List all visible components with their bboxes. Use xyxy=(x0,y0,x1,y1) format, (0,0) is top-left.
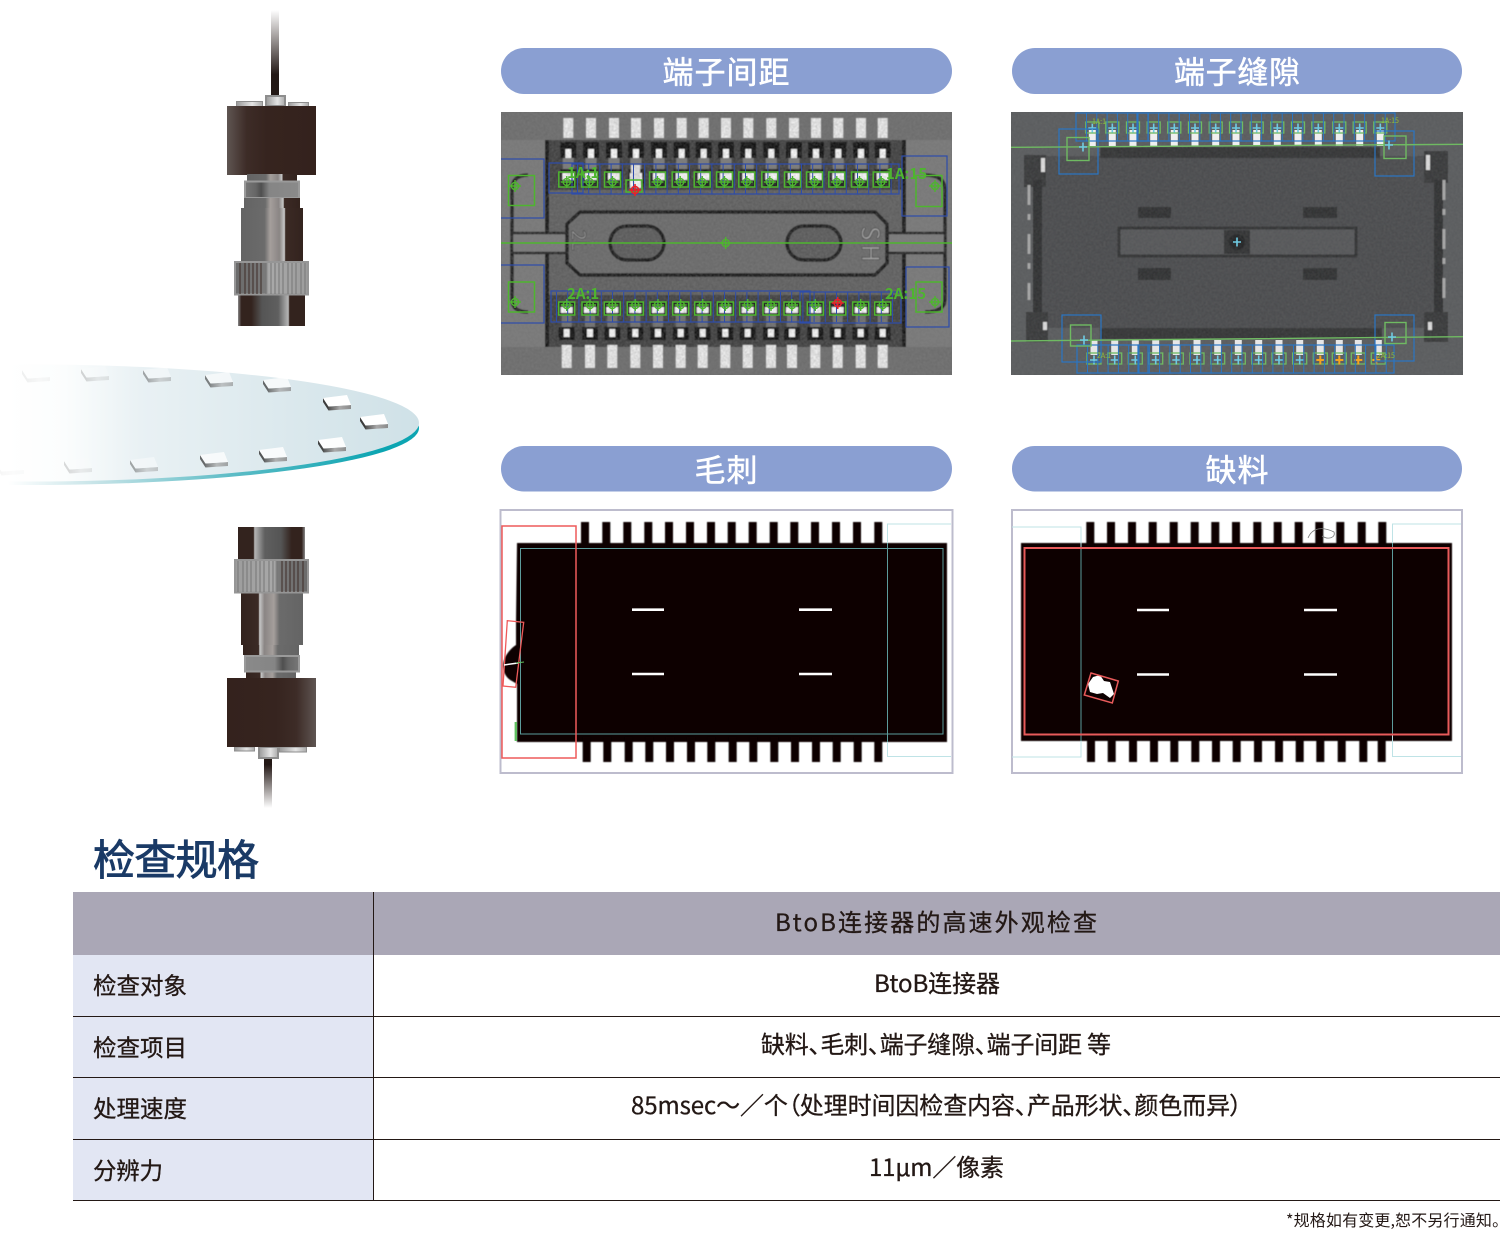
connector housing: 2L xyxy=(566,230,593,251)
detection frames xyxy=(502,524,951,758)
connector housing xyxy=(501,112,952,375)
row: inspection items: 检查项目 xyxy=(93,1029,187,1063)
table header row xyxy=(73,892,1500,955)
inspection image: terminal gap xyxy=(1011,112,1463,375)
row: processing speed: 处理速度 xyxy=(93,1090,187,1124)
pins and markers xyxy=(1011,113,1463,373)
row: resolution: 分辨力 xyxy=(93,1152,163,1186)
row: inspection items: 缺料、毛刺、端子缝隙、端子间距 等 xyxy=(761,1025,1111,1060)
heading pill: missing material xyxy=(1012,446,1462,492)
green measurement marks xyxy=(501,162,952,315)
row: resolution xyxy=(93,1148,1004,1186)
heading pill: terminal gap xyxy=(1012,48,1462,94)
row: inspection target: BtoB连接器 xyxy=(874,964,1000,999)
green measurement marks: 2A:1 xyxy=(567,283,599,304)
row: inspection target: 检查对象 xyxy=(93,967,187,1001)
pins and markers: 1A:15 xyxy=(1381,116,1399,126)
connector base xyxy=(1024,114,1451,342)
heading pill: burr xyxy=(501,446,952,492)
blue search regions xyxy=(500,156,949,327)
heading pill: terminal pitch xyxy=(501,48,952,94)
connector camera: bottom xyxy=(227,527,316,808)
missing-material blob xyxy=(1088,675,1114,698)
heading pill: missing material: 缺料 xyxy=(1206,446,1268,490)
heading pill: terminal pitch: 端子间距 xyxy=(662,48,790,92)
title: inspection specs: 检查规格 xyxy=(93,827,259,888)
inspection image: terminal pitch xyxy=(500,112,952,375)
row: processing speed: 85msec～／个（处理时间因检查内容、产品形状、颜色而异） xyxy=(631,1086,1242,1121)
slits xyxy=(1137,610,1337,674)
pins and markers: 2A:1 xyxy=(1097,351,1111,361)
pins and markers: 1A:1 xyxy=(1092,117,1106,127)
inspection image: missing material xyxy=(1012,510,1462,773)
wafer disc with chips xyxy=(0,364,419,485)
green measurement marks: 2A:15 xyxy=(885,283,926,304)
binarised connector body xyxy=(1021,543,1452,741)
detection frames xyxy=(1012,524,1461,757)
row label column xyxy=(73,955,373,1201)
row: inspection items xyxy=(93,1025,1111,1063)
spec table xyxy=(73,892,1500,1201)
slits xyxy=(632,610,832,674)
row: inspection target xyxy=(93,964,1000,1001)
connector housing: SH xyxy=(855,226,890,262)
inspection image: burr xyxy=(500,510,952,773)
pins and markers: 2A:15 xyxy=(1377,351,1395,361)
connector camera: top xyxy=(227,10,316,326)
row: processing speed xyxy=(93,1086,1242,1124)
footnote: *规格如有变更,恕不另行通知。 xyxy=(1286,1207,1500,1231)
green measurement marks: 1A:15 xyxy=(886,163,927,184)
binarised connector body xyxy=(503,543,947,742)
green measurement marks: 1A:1 xyxy=(567,162,599,183)
table header row: BtoB连接器的高速外观检查 xyxy=(775,903,1097,938)
heading pill: burr: 毛刺 xyxy=(694,446,758,490)
heading pill: terminal gap: 端子缝隙 xyxy=(1174,48,1300,92)
row: resolution: 11µm／像素 xyxy=(869,1148,1004,1183)
